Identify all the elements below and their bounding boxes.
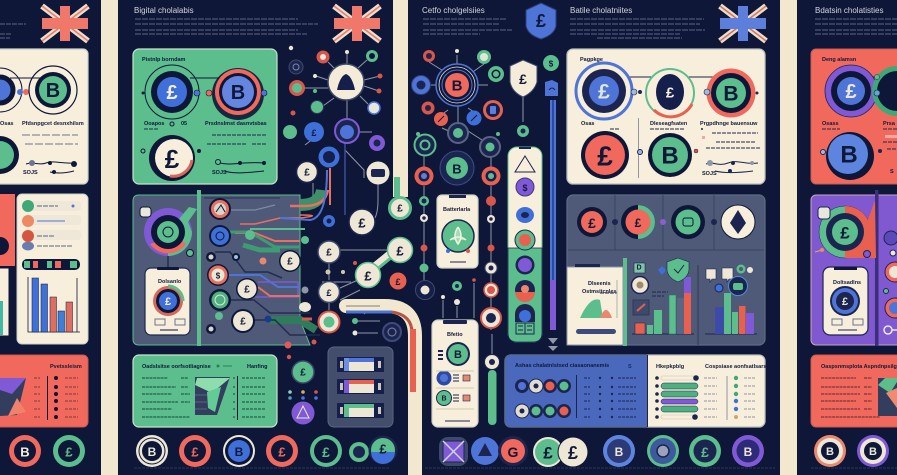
coin: green B: B — [46, 80, 60, 102]
cream sub-card — [567, 264, 623, 345]
coin: blue — [223, 435, 255, 467]
bar chart: right — [705, 293, 757, 334]
phone: lower: Bfetio — [447, 332, 463, 338]
colour strip — [22, 259, 80, 270]
coin: purple ring: £ — [845, 81, 857, 103]
coin: blue pound ring: £ — [598, 80, 610, 104]
coin: green pound — [533, 437, 563, 467]
progress bars — [655, 375, 699, 420]
phone: lower: B — [441, 396, 447, 402]
coin: purple — [732, 435, 764, 467]
coin: red green: £ — [635, 216, 642, 230]
coin: cream dark — [646, 69, 694, 117]
cream coin card: Dleseagfsaten — [650, 121, 688, 127]
small coins under network: £ — [300, 368, 306, 378]
coin: green with red ring: B — [723, 82, 739, 106]
node: cream lower: £ — [240, 316, 246, 328]
coin: cream pound: £ — [165, 144, 180, 174]
coin: green — [689, 435, 721, 467]
cream pound nodes: £ — [396, 244, 404, 258]
green card: Pistnlp borndam — [142, 57, 186, 63]
coin: ethereum cream — [721, 205, 755, 239]
cream pound nodes: £ — [358, 216, 366, 230]
icon: cream shield — [510, 60, 537, 97]
coin: blue — [471, 437, 499, 465]
circuit traces — [204, 170, 328, 335]
flag: blue — [720, 6, 766, 41]
ring chart — [140, 207, 197, 256]
phone: blue coin: Dolsanlo — [158, 279, 182, 285]
coin: green ring — [349, 442, 369, 462]
bottom split card: Ashas chalatnlstsed ciasaonanemis — [515, 363, 609, 369]
green bottom card: Hanfing — [247, 364, 267, 370]
divider green accent — [394, 177, 400, 197]
cream coin card: Pagpkge — [580, 57, 603, 63]
coin: target — [647, 435, 679, 467]
coin: green with red ring — [706, 68, 756, 118]
green card: 05 — [181, 121, 187, 127]
coin: cream B — [136, 435, 168, 467]
intro text lines — [135, 19, 298, 34]
coin: cream pound: £ — [568, 443, 578, 463]
node: cream centre: £ — [244, 284, 250, 296]
satellite nodes — [412, 49, 504, 328]
coin: cream red ring: B — [826, 446, 834, 458]
phone: top — [437, 195, 478, 268]
cream pound nodes: £ — [364, 268, 372, 284]
bar chart: centre — [632, 277, 694, 334]
coin: green pound: £ — [543, 444, 553, 462]
coin: partial — [872, 66, 897, 116]
bottom split card — [505, 355, 766, 427]
panel: right poster — [797, 0, 897, 475]
panel: left poster — [0, 0, 101, 475]
gray circuit panel — [133, 170, 328, 346]
rack panel — [328, 347, 393, 427]
coin: green pound: £ — [65, 444, 73, 460]
vertical green pill — [484, 334, 500, 425]
coin: green: £ — [701, 444, 709, 460]
cream coin card: Prgpdhnge bauensuw — [700, 121, 758, 127]
icon: cream shield: £ — [519, 71, 527, 87]
coin: red B: B — [20, 444, 30, 460]
phone: purple card: Doltsadlns — [833, 280, 861, 286]
node: green — [209, 289, 231, 311]
hub: cream — [328, 64, 364, 100]
gray dashboard panel — [567, 195, 765, 346]
cream sub-card: Ostmsitcnles — [582, 289, 617, 295]
green card: Prsdnslmst dasnvtsbas — [205, 121, 267, 127]
coin: half green — [368, 436, 398, 464]
heading: Bdatsin cholatisties — [815, 6, 883, 15]
left header text lines — [0, 24, 26, 38]
coin: cream red ring — [814, 435, 846, 467]
dashboard icons — [632, 258, 753, 315]
mini rows — [22, 200, 81, 250]
coin: green pound — [53, 435, 85, 467]
dashboard icons: D — [636, 264, 642, 272]
circuit coins — [206, 198, 301, 334]
heading: Bigital cholalabis — [134, 6, 194, 15]
coin: red pound: £ — [597, 140, 613, 172]
coin: green navy — [671, 205, 705, 239]
node: red — [209, 198, 231, 220]
coin: cream pound — [149, 135, 195, 181]
tall pill — [508, 147, 542, 342]
coin: red pound — [581, 131, 629, 179]
text lines — [423, 19, 512, 34]
left cream card — [0, 49, 88, 184]
curved tube — [346, 306, 415, 475]
tall pill: $ — [522, 183, 528, 193]
coin: cream dark: £ — [666, 84, 675, 102]
cream coin card — [567, 49, 765, 184]
bottom split card: Cospsiase aonfsatlsars — [705, 364, 766, 370]
coin: red ring — [498, 436, 528, 466]
icon: blue shield: £ — [536, 11, 546, 31]
coin: half green: £ — [379, 442, 387, 456]
ring chart — [818, 200, 876, 258]
hub: rings: B — [452, 78, 463, 94]
phone: top: Batterlarla — [443, 207, 471, 213]
coin: red green — [621, 205, 655, 239]
cream pound nodes: £ — [326, 248, 332, 258]
green bottom card: Oadslsitse oorfsotliagnise — [142, 364, 211, 370]
green card: SOJS — [212, 170, 227, 176]
purple card — [811, 190, 897, 346]
phone: blue coin: £ — [165, 296, 171, 308]
heading: right: Batile cholatniites — [570, 6, 632, 15]
bottom split card: S — [628, 364, 632, 370]
coin: green pound: £ — [322, 444, 330, 460]
nodes beside tube — [352, 318, 401, 341]
left red card: Pvetssleism — [50, 364, 82, 370]
green card — [133, 49, 277, 184]
red coin card: S — [890, 169, 894, 175]
bottom split card: Hkepkpblg — [656, 364, 684, 370]
flag: left — [42, 6, 88, 41]
coin: red-blue B: B — [231, 82, 245, 104]
centre network — [412, 49, 559, 351]
phone: purple card: £ — [842, 296, 848, 308]
bottom coin row: right — [439, 435, 764, 468]
coin: green B: B — [661, 142, 679, 170]
panel: second poster — [118, 0, 434, 475]
green card: Ooapos — [144, 121, 164, 127]
centre network: $ — [549, 60, 554, 68]
coin: blue B: B — [840, 142, 858, 168]
red coin card: Osass — [822, 121, 839, 127]
cream pound nodes: £ — [395, 277, 401, 287]
icon: blue shield — [526, 3, 556, 39]
heading: centre: Cetfo cholgelsiies — [422, 6, 485, 15]
panel: third poster — [408, 0, 780, 475]
hub: rings — [436, 64, 478, 106]
satellites: £ — [304, 168, 310, 178]
cream sub-card: Dlseenis — [588, 281, 611, 287]
coin: purple cross — [439, 437, 468, 466]
coin: purple cream — [857, 435, 889, 467]
coin: blue pound — [145, 65, 199, 119]
coin: blue pound: £ — [166, 82, 178, 104]
coin: red navy — [577, 207, 607, 237]
satellites: £ — [397, 204, 403, 214]
phone: lower: B — [454, 349, 462, 361]
coin: red pound — [179, 435, 211, 467]
coin: red navy: £ — [588, 215, 596, 231]
coin: blue: B — [235, 445, 244, 459]
coin: blue B — [603, 435, 635, 467]
satellites: £ — [311, 128, 317, 138]
coin: red B — [9, 435, 41, 467]
coin: green pound — [310, 435, 342, 467]
icon: polyhedron — [878, 378, 897, 416]
red bottom card: Oaspsnmsplota Aspndnpsilg — [821, 364, 897, 370]
ring chart: £ — [840, 224, 850, 242]
network diagram — [282, 46, 434, 359]
green bottom card — [133, 355, 277, 427]
node: cream right: £ — [287, 256, 293, 268]
coin: red ring: G — [508, 444, 519, 460]
node: red dollar: $ — [216, 272, 221, 280]
satellite nodes: B — [452, 162, 462, 176]
bottom coin row — [136, 435, 398, 467]
node: blue — [209, 225, 231, 247]
small coins under network — [288, 361, 318, 424]
flag: centre — [334, 6, 380, 41]
red coin card: Prsa — [883, 121, 896, 127]
blue tag — [545, 80, 558, 96]
coin: cream pound — [558, 436, 588, 468]
cream pound nodes: £ — [326, 288, 332, 298]
coin: purple: B — [744, 445, 753, 459]
red bottom card — [811, 355, 897, 427]
left cream card: SOJS — [23, 170, 38, 176]
coin: red-blue B — [212, 68, 264, 120]
bar chart: left — [28, 277, 80, 332]
left red card — [0, 355, 88, 427]
red coin card — [811, 49, 897, 184]
coin: purple cream: B — [869, 446, 877, 458]
phone: blue coin — [145, 267, 190, 335]
text lines right — [570, 19, 705, 38]
vertical bar — [548, 100, 558, 351]
coin: blue B: B — [615, 445, 624, 459]
coin: red — [266, 435, 298, 467]
connector: green strip — [373, 251, 394, 268]
left cream card: Pfdsnpgcet desnxhilsm — [22, 121, 84, 127]
phone: purple card — [823, 267, 868, 335]
coin: red pound: £ — [191, 444, 199, 460]
text lines — [815, 19, 897, 34]
red coin card: Deng alamsn — [822, 57, 857, 63]
coin: red: £ — [278, 444, 286, 460]
icon: polyhedron — [195, 377, 230, 415]
side nodes — [884, 231, 897, 334]
cream coin card: SOJS — [702, 171, 717, 177]
left cream card: Osas — [0, 121, 13, 127]
phone: lower — [432, 320, 478, 427]
left dashboard card — [0, 194, 88, 345]
coin: blue pound ring — [576, 63, 632, 119]
cream coin card: Osas — [581, 121, 594, 127]
coin: green B — [648, 133, 692, 177]
coin: cream B: B — [148, 445, 157, 459]
cream pound nodes — [284, 209, 434, 359]
satellites — [282, 46, 412, 227]
